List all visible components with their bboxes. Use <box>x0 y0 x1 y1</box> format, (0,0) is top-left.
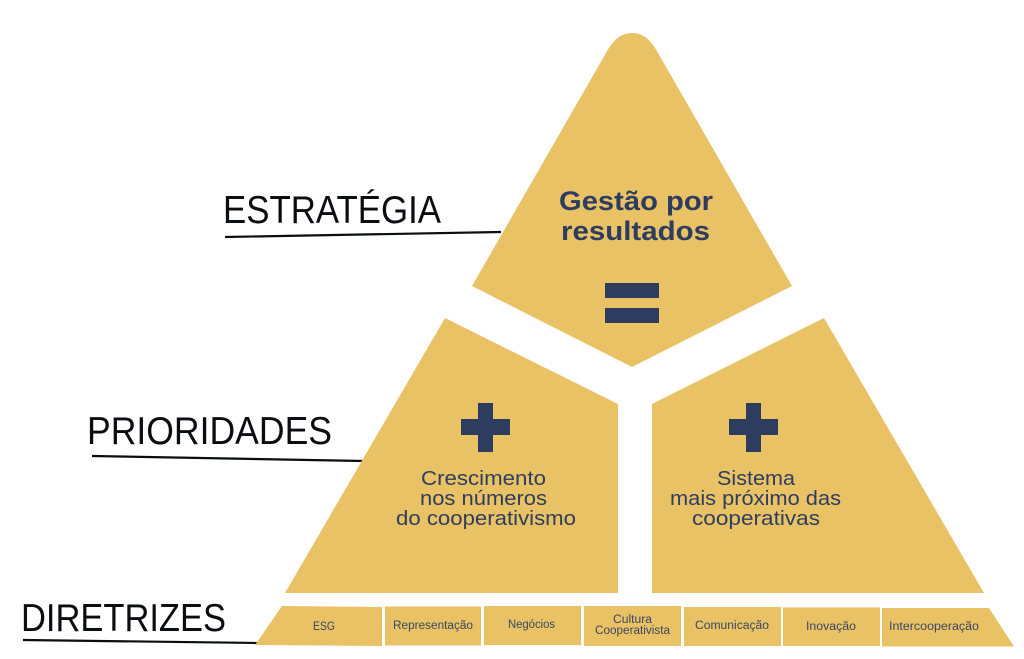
label: DIRETRIZES: DIRETRIZES <box>21 597 226 640</box>
text: Sistema mais próximo das cooperativas: mais próximo das <box>670 487 841 510</box>
cell: Intercooperação <box>882 608 1014 646</box>
icon: plus sign left <box>461 403 510 452</box>
label: PRIORIDADES: PRIORIDADES <box>87 410 332 453</box>
text: Sistema mais próximo das cooperativas: cooperativas <box>692 507 820 530</box>
cell: Inovação <box>783 608 880 646</box>
cell: ESG: ESG <box>313 621 335 633</box>
heading: Gestão por resultados: resultados <box>561 216 710 246</box>
heading: Gestão por resultados <box>559 186 714 246</box>
cell: Representação <box>385 606 481 646</box>
cell: Cultura Cooperativista: Cooperativista <box>595 625 671 637</box>
cell: Negócios: Negócios <box>508 619 555 631</box>
cell: Cultura Cooperativista <box>584 606 681 646</box>
icon: plus sign right <box>729 403 778 452</box>
cell: Intercooperação: Intercooperação <box>889 621 979 633</box>
cell: Comunicação <box>684 607 781 646</box>
cell: Negócios <box>484 606 581 645</box>
cell: Representação: Representação <box>393 620 473 632</box>
text: Crescimento nos números do cooperativismo: do cooperativismo <box>396 507 576 530</box>
label: ESTRATÉGIA: ESTRATÉGIA <box>223 189 441 232</box>
text: Sistema mais próximo das cooperativas <box>670 467 841 530</box>
icon: equals sign <box>605 283 659 323</box>
cell: Cultura Cooperativista: Cultura <box>613 614 653 626</box>
cell: Comunicação: Comunicação <box>695 620 769 632</box>
panel: prioridade sistema <box>652 318 984 593</box>
text: Crescimento nos números do cooperativismo: Crescimento <box>421 467 546 490</box>
text: Crescimento nos números do cooperativismo <box>396 467 576 530</box>
panel: estratégia top triangle <box>472 33 792 367</box>
cell: Inovação: Inovação <box>806 621 856 633</box>
cell: ESG <box>255 606 382 646</box>
panel: prioridade crescimento <box>285 318 618 593</box>
text: Crescimento nos números do cooperativismo: nos números <box>420 487 547 510</box>
text: Sistema mais próximo das cooperativas: Sistema <box>717 467 796 490</box>
heading: Gestão por resultados: Gestão por <box>559 186 714 216</box>
panel: diretrizes strip <box>255 606 1014 646</box>
